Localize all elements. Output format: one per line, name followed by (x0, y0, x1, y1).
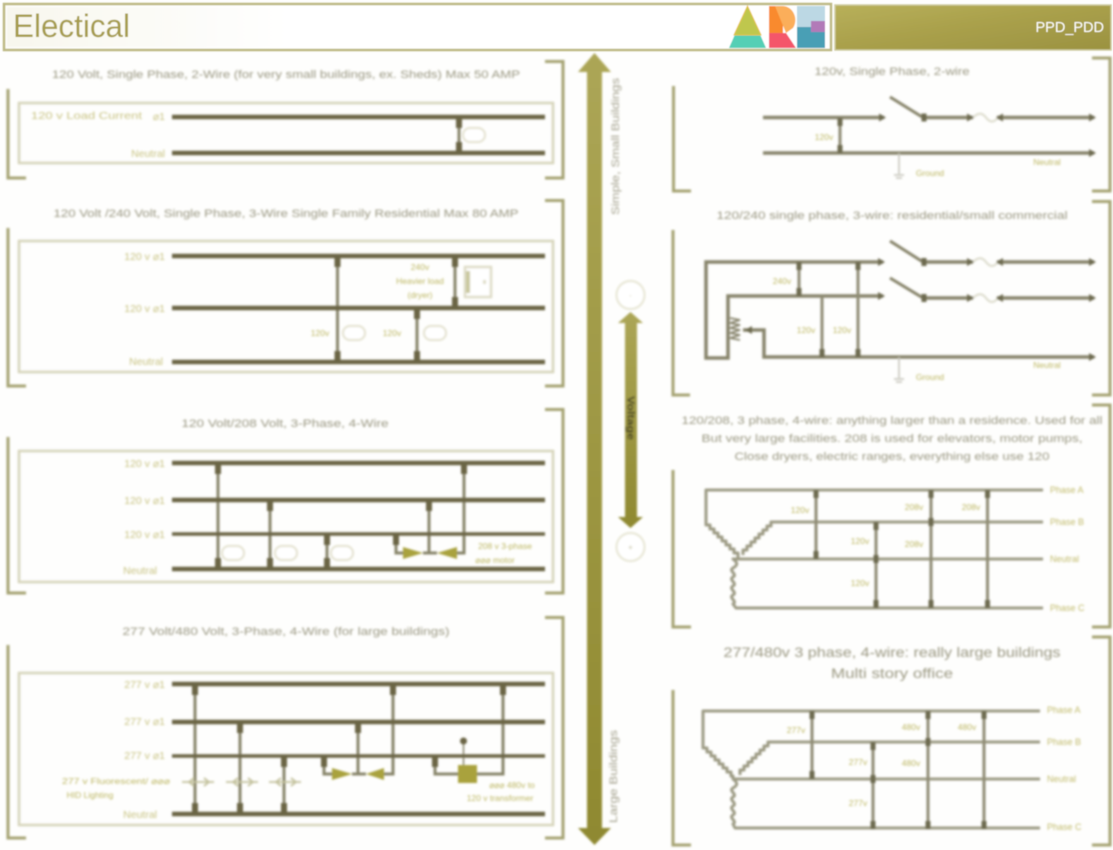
panel: 277/480V 3-phase right: Neutral (1047, 774, 1076, 784)
heading: 120 Volt/208 Volt, 3-Phase, 4-Wire (182, 418, 388, 430)
panel: 277/480V 3-phase left: Neutral (123, 809, 157, 821)
delta wye wiring (703, 711, 1040, 829)
heading: Close dryers, electric ranges, everything else use 120 (734, 451, 1050, 463)
arrow: building size scale (578, 53, 611, 845)
panel: 120/240V 3-wire left: 120v (383, 328, 402, 338)
panel: 120/208V 3-phase left: 120 v ⌀1 (124, 529, 165, 541)
icon: minus circle (616, 281, 644, 309)
panel: 120/208V 3-phase right: Phase C (1050, 603, 1085, 613)
panel: 120/208V 3-phase left: Neutral (123, 565, 157, 577)
arrow: voltage scale (618, 312, 643, 528)
panel: 120/240V 3-wire left: 120 v ⌀1 (124, 251, 165, 263)
panel: 277/480V 3-phase left: 277 v ⌀1 (124, 679, 165, 691)
voltage label: Voltage (624, 396, 636, 441)
panel: 277/480V 3-phase left: 120 v transformer (467, 793, 533, 803)
panel: 120/240V 3-wire left: Neutral (129, 356, 163, 368)
switched wiring (763, 97, 1096, 157)
panel: 277/480V 3-phase left: 277 v ⌀1 (124, 750, 165, 762)
panel: 120/240V 3-wire left (8, 200, 563, 386)
panel: 120/208V 3-phase left: 120 v ⌀1 (124, 495, 165, 507)
lighting label: 277 v Fluorescent/ ⌀⌀⌀ (62, 776, 171, 786)
icon: plus circle (616, 533, 644, 561)
panel: 277/480V 3-phase right: Phase C (1047, 822, 1082, 832)
header right panel (835, 5, 1111, 50)
heading: 120 Volt /240 Volt, Single Phase, 3-Wire Single Family Residential Max 80 AMP (54, 208, 518, 220)
panel: 120/240V 3-wire left: 120 v ⌀1 (124, 303, 165, 315)
heading (724, 644, 1060, 681)
panel: 277/480V 3-phase right: 480v (902, 758, 921, 768)
panel: 277/480V 3-phase left: 277 v ⌀1 (124, 716, 165, 728)
panel: 120V 2-wire left: 120 v Load Current (31, 110, 142, 122)
panel: 277/480V 3-phase right: Phase A (1047, 705, 1081, 715)
scale label bottom: Large Buildings (608, 729, 620, 823)
panel: 120V 2-wire right (674, 58, 1110, 191)
panel: 277/480V 3-phase right: 277v (787, 725, 806, 735)
section code: PPD_PDD (1036, 20, 1104, 36)
heading: Multi story office (831, 665, 953, 681)
title box (4, 4, 831, 50)
panel: 120/240V 3-wire left: (dryer) (407, 290, 433, 300)
panel: 120/240V 3-wire right: 120v (833, 325, 852, 335)
transformer label: ⌀⌀⌀ 480v to (489, 780, 535, 790)
motor (403, 547, 457, 559)
panel: 120/208V 3-phase left: ⌀⌀⌀ motor (475, 555, 515, 565)
panel: 120/208V 3-phase right: 208v (905, 502, 924, 512)
panel: 277/480V 3-phase right: 277v (849, 798, 868, 808)
panel: 120/208V 3-phase right: Phase B (1050, 517, 1084, 527)
panel: 277/480V 3-phase left (8, 618, 563, 838)
ground (894, 153, 944, 178)
switched wiring (706, 241, 1096, 361)
ground: Ground (916, 168, 944, 178)
panel: 120/240V 3-wire left: Heavier load (396, 276, 444, 286)
panel: 120/208V 3-phase right: 208v (962, 502, 981, 512)
panel: 120/208V 3-phase right: 120v (791, 505, 810, 515)
panel: 277/480V 3-phase right: 480v (958, 722, 977, 732)
heading: 120v, Single Phase, 2-wire (814, 66, 970, 78)
panel: 120/240V 3-wire right: 120v (797, 325, 816, 335)
delta wye wiring (706, 490, 1043, 608)
heading (682, 415, 1102, 463)
title: Electical (13, 8, 130, 44)
panel: 120/208V 3-phase right: 208v (905, 539, 924, 549)
panel: 120/240V 3-wire right: 240v (773, 276, 792, 286)
panel: 120V 2-wire right: Neutral (1033, 157, 1061, 167)
panel: 277/480V 3-phase right: Phase B (1047, 737, 1081, 747)
logo (729, 6, 825, 48)
panel: 120/208V 3-phase right: Neutral (1050, 554, 1079, 564)
panel: 120/208V 3-phase right (673, 405, 1110, 627)
icon: plus circle: + (628, 543, 633, 552)
icon: minus circle: - (629, 291, 632, 300)
panel: 120/208V 3-phase right: 120v (851, 536, 870, 546)
scale label top: Simple, Small Buildings (610, 77, 622, 215)
load (463, 128, 485, 142)
panel: 120/240V 3-wire right: Neutral (1033, 360, 1061, 370)
panel: 120/208V 3-phase left (8, 410, 563, 593)
dryer label: 240v (411, 262, 430, 272)
ground (894, 357, 944, 382)
panel: 120/240V 3-wire right (673, 202, 1110, 395)
panel: 277/480V 3-phase left: HID Lighting (67, 790, 114, 800)
motor (332, 768, 384, 780)
panel: 120/208V 3-phase right: Phase A (1050, 485, 1084, 495)
heading: 120 Volt, Single Phase, 2-Wire (for very small buildings, ex. Sheds) Max 50 AMP (52, 69, 520, 81)
panel: 120/240V 3-wire left: 120v (311, 328, 330, 338)
lighting symbols (182, 778, 301, 786)
panel: 277/480V 3-phase right: 277v (849, 757, 868, 767)
heading: 277/480v 3 phase, 4-wire: really large buildings (724, 644, 1060, 660)
dryer load (465, 267, 491, 297)
panel: 277/480V 3-phase right: 480v (902, 722, 921, 732)
panel: 277/480V 3-phase right (673, 637, 1110, 845)
heading: But very large facilities. 208 is used for elevators, motor pumps, (702, 433, 1082, 445)
panel: 120/208V 3-phase left: 120 v ⌀1 (124, 458, 165, 470)
panel: 120/208V 3-phase right: 120v (851, 578, 870, 588)
heading: 120/208, 3 phase, 4-wire: anything larger than a residence. Used for all (682, 415, 1102, 427)
header bar (4, 4, 1111, 50)
ground: Ground (916, 372, 944, 382)
transformer (458, 738, 477, 783)
panel: 120V 2-wire left (8, 62, 563, 178)
heading: 277 Volt/480 Volt, 3-Phase, 4-Wire (for large buildings) (122, 626, 450, 638)
panel: 120V 2-wire right: 120v (815, 132, 834, 142)
motor label: 208 v 3-phase (478, 541, 532, 551)
panel: 120V 2-wire left: ⌀1 (153, 111, 165, 123)
panel: 120V 2-wire left: Neutral (131, 148, 165, 160)
heading: 120/240 single phase, 3-wire: residential/small commercial (716, 210, 1068, 222)
